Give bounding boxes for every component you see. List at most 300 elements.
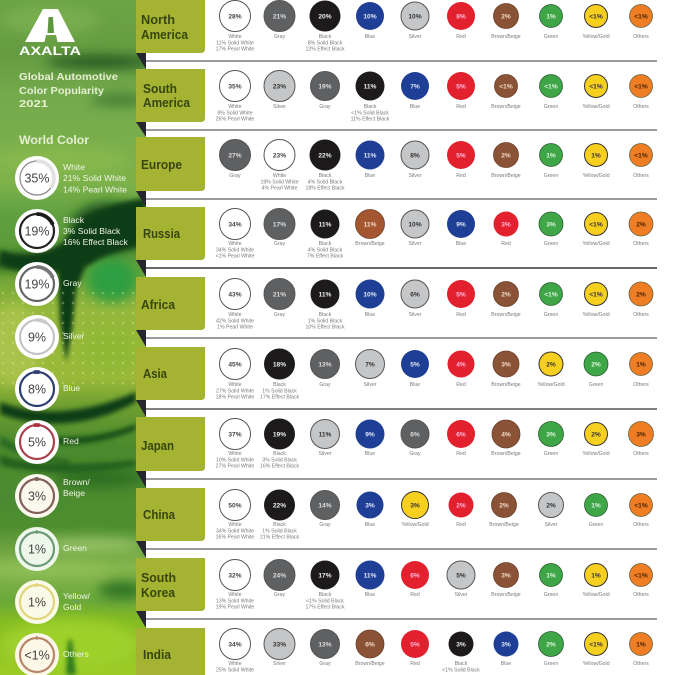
row: South America colors: 11% <box>364 84 377 90</box>
row: Japan colors: 11% <box>319 432 332 438</box>
row: South Korea colors: Green <box>544 592 558 598</box>
row: India colors: 3% <box>501 642 511 648</box>
row: China colors: Red <box>456 522 466 528</box>
row: Africa colors: 6% <box>410 292 420 298</box>
row: India colors: 5% <box>410 642 420 648</box>
row: Asia colors: 1% <box>636 362 646 368</box>
row: South America colors: <1% <box>589 84 603 90</box>
row: Asia colors: 2% <box>546 362 556 368</box>
row: South Korea colors: 13% Solid White <box>216 598 254 604</box>
panel: green photographic background <box>0 0 155 675</box>
panel: Asia label <box>136 347 205 400</box>
panel: Africa label <box>136 277 205 330</box>
row: Africa colors: 2% <box>636 292 646 298</box>
logo: Axalta: AXALTA <box>19 46 81 58</box>
row: Africa colors: 10% Effect Black <box>305 325 345 331</box>
row: Russia colors: Silver <box>409 241 422 247</box>
row: Europe colors: 2% <box>501 152 511 160</box>
row: Asia colors: 45% <box>228 362 242 368</box>
row: Russia colors: 11% <box>319 222 332 228</box>
row: North America colors: <1% <box>634 14 648 20</box>
row: India colors: 33% <box>273 642 286 648</box>
row: Asia colors: Silver <box>364 382 377 388</box>
row: Africa colors: Green <box>544 312 558 318</box>
row: Africa colors: 2% <box>501 292 511 298</box>
row: India colors: Brown/Beige <box>355 661 385 667</box>
row: North America colors: 21% <box>273 14 286 20</box>
row: India colors: Blue <box>501 661 511 667</box>
world color: Black 19%: Black <box>63 215 85 225</box>
row: South Korea colors: 17% <box>318 572 332 580</box>
panel: Africa label: Africa <box>141 297 176 312</box>
row: Asia colors: 5% <box>410 362 420 368</box>
row: Africa colors: 21% <box>273 292 286 298</box>
row: North America colors: Silver <box>409 34 422 40</box>
row: North America colors: 10% <box>363 14 377 20</box>
row: Russia colors: White <box>228 241 242 247</box>
row: South Korea colors: Black <box>319 592 332 598</box>
row: North America colors: 11% Solid White <box>216 40 254 46</box>
row: Japan colors: Others <box>633 451 649 457</box>
row: Japan colors: 10% Solid White <box>216 457 254 463</box>
row: Europe colors: <1% <box>634 152 648 160</box>
row: South America colors: 19% <box>318 84 332 90</box>
row: Russia colors: Black <box>319 241 332 247</box>
row: South Korea colors: White <box>228 592 242 598</box>
row: Asia colors: Others <box>633 382 649 388</box>
row: Asia colors: 17% Effect Black <box>260 395 299 401</box>
row: Asia colors: 18% Pearl White <box>216 395 254 401</box>
row: Japan colors: Red <box>456 451 466 457</box>
row: India colors: 6% <box>365 642 375 648</box>
panel: Europe label <box>136 137 205 191</box>
row: Europe colors: 23% <box>273 152 286 160</box>
row: Africa colors: Black <box>319 312 332 318</box>
row: Europe colors: 19% Solid White <box>260 179 299 185</box>
world color: Gray 19% <box>15 262 82 306</box>
panel: Europe label: Europe <box>141 157 182 172</box>
panel: North America label: North <box>141 12 175 27</box>
row: Japan colors: 4% <box>501 432 511 438</box>
row: Asia colors: 18% <box>273 362 286 368</box>
row: North America colors: White <box>228 34 242 40</box>
panel: North America label <box>136 0 205 53</box>
row: China colors: 2% <box>546 502 556 510</box>
row: China colors: 2% <box>456 502 466 510</box>
row: North America colors: 1% <box>546 14 556 20</box>
panel: North America label: America <box>141 27 189 42</box>
world color: Yellow/Gold 1%: Gold <box>63 602 81 612</box>
world color: Others <1%: <1% <box>24 648 50 662</box>
row: Africa colors: 10% <box>363 292 377 298</box>
row: India colors: Black <box>455 661 468 667</box>
row: Russia colors: 11% <box>364 222 377 228</box>
row: Europe colors: 8% <box>410 152 420 160</box>
row: Asia colors: 7% <box>365 362 375 368</box>
row: India colors: Silver <box>273 661 286 667</box>
row: South Korea colors: <1% <box>634 572 648 580</box>
row: Asia colors: 1% Solid Black <box>262 388 297 394</box>
row: South Korea colors: Others <box>633 592 649 598</box>
row: South America colors: Red <box>456 104 466 110</box>
row: Asia colors: 4% <box>456 362 466 368</box>
row: Africa colors: 11% <box>319 292 332 298</box>
world color: Brown/Beige 3% <box>15 474 90 518</box>
row: China colors: Yellow/Gold <box>401 522 429 528</box>
row: South Korea colors: 24% <box>273 572 286 580</box>
row: Japan colors: 37% <box>228 432 242 438</box>
row: South America colors: 23% <box>273 84 286 90</box>
row: North America colors: Others <box>633 34 649 40</box>
row: India colors: 1% <box>636 642 646 648</box>
row: Russia colors: Gray <box>274 241 286 247</box>
row: India colors: <1% Solid Black <box>442 667 480 673</box>
row: India colors: 25% Solid White <box>216 667 254 673</box>
row: North America colors: 8% Solid Black <box>308 40 343 46</box>
world color: White 35% <box>15 156 127 200</box>
row: South Korea colors: 1% <box>546 572 556 580</box>
row: North America colors: 10% <box>408 14 422 20</box>
row: South America colors: Others <box>633 104 649 110</box>
world color: Yellow/Gold 1%: Yellow/ <box>63 591 91 601</box>
row: Asia colors: Yellow/Gold <box>537 382 565 388</box>
row: South America colors: Brown/Beige <box>491 104 521 110</box>
world color: Yellow/Gold 1%: 1% <box>28 596 46 610</box>
row: South Korea colors: 6% <box>410 572 420 580</box>
row: Japan colors: 19% <box>273 432 286 438</box>
row: South America colors <box>216 70 652 123</box>
row: China colors: 3% <box>365 502 375 510</box>
row: Russia colors: 2% <box>636 222 646 228</box>
world color: White 35%: White <box>63 162 85 172</box>
row: North America colors: 28% <box>228 14 242 20</box>
row: South America colors: <1% <box>499 84 513 90</box>
world color: Yellow/Gold 1% <box>15 580 91 624</box>
row: South Korea colors: 32% <box>228 572 242 580</box>
world color: Black 19%: 16% Effect Black <box>63 237 129 247</box>
world color: Black 19%: 19% <box>24 224 50 238</box>
row: South America colors: Silver <box>273 104 286 110</box>
row: South America colors: Yellow/Gold <box>582 104 610 110</box>
heading: World Color: World Color <box>19 133 89 147</box>
row: North America colors <box>216 0 652 53</box>
row: Russia colors: 3% <box>546 222 556 228</box>
row: South Korea colors <box>216 560 652 611</box>
row: Africa colors <box>216 278 653 331</box>
row: Europe colors: Green <box>544 173 558 179</box>
panel: Japan label <box>136 417 205 471</box>
row: Africa colors: White <box>228 312 242 318</box>
row: Africa colors: Brown/Beige <box>491 312 521 318</box>
row: Europe colors: Yellow/Gold <box>582 173 610 179</box>
panel: South Korea label: South <box>141 570 176 585</box>
row: North America colors: 12% Effect Black <box>305 47 345 53</box>
row: Japan colors: Gray <box>409 451 421 457</box>
row: Africa colors: 43% <box>228 292 242 298</box>
row: Africa colors: Gray <box>274 312 286 318</box>
row: Japan colors: 9% <box>365 432 375 438</box>
row: Japan colors: Black <box>273 451 286 457</box>
row: Russia colors: 34% <box>228 222 242 228</box>
row: China colors: 2% <box>499 502 509 510</box>
world color: Others <1% <box>15 633 89 675</box>
row: China colors: White <box>228 522 242 528</box>
row: Russia colors: Green <box>544 241 558 247</box>
panel: China label: China <box>143 507 176 522</box>
row: India colors: 3% <box>456 642 466 648</box>
title: 2021 <box>19 98 48 110</box>
row: China colors <box>216 490 652 541</box>
row: South Korea colors: 5% <box>456 572 466 580</box>
row: Asia colors: 2% <box>591 362 601 368</box>
world color: Red 5%: 5% <box>28 436 46 450</box>
world color: Green 1%: 1% <box>28 542 46 556</box>
row: South America colors: 9% Solid White <box>217 110 253 116</box>
world color: Brown/Beige 3%: Beige <box>63 488 85 498</box>
row: Europe colors: Silver <box>409 173 422 179</box>
row: South America colors: <1% <box>544 84 558 90</box>
row: North America colors: Green <box>544 34 558 40</box>
row: Europe colors: Red <box>456 173 466 179</box>
world color: Black 19%: 3% Solid Black <box>63 226 121 236</box>
world color: Blue 8%: Blue <box>63 383 80 393</box>
row: Japan colors: 6% <box>410 432 420 438</box>
row: Japan colors: Brown/Beige <box>491 451 521 457</box>
row: China colors: Others <box>633 522 649 528</box>
row: Europe colors: 5% <box>456 152 466 160</box>
row: North America colors: Gray <box>274 34 286 40</box>
row: Russia colors: 4% Solid Black <box>308 247 343 253</box>
row: China colors: 1% <box>591 502 601 510</box>
world color: Blue 8%: 8% <box>28 382 46 396</box>
row: South America colors: 7% <box>410 84 420 90</box>
row: South America colors: 5% <box>456 84 466 90</box>
row: Europe colors: 1% <box>591 152 601 160</box>
row: Africa colors: Blue <box>365 312 375 318</box>
row: China colors: 50% <box>228 502 242 510</box>
world color: Brown/Beige 3%: 3% <box>28 490 46 504</box>
row: Europe colors: Gray <box>229 173 241 179</box>
row: South Korea colors: Gray <box>274 592 286 598</box>
world color: Gray 19%: Gray <box>63 278 82 288</box>
world color: Brown/Beige 3%: Brown/ <box>63 477 90 487</box>
row: Japan colors: 3% <box>636 432 646 438</box>
row: China colors: Gray <box>319 522 331 528</box>
row: China colors: Blue <box>365 522 375 528</box>
world color: Silver 9% <box>15 315 85 359</box>
row: Russia colors <box>216 208 653 260</box>
row: Russia colors: Yellow/Gold <box>582 241 610 247</box>
panel: Russia label: Russia <box>143 226 181 241</box>
row: China colors: 3% <box>410 502 420 510</box>
row: Japan colors: 3% Solid Black <box>262 457 297 463</box>
row: Asia colors: Gray <box>319 382 331 388</box>
row: China colors: 1% Solid Black <box>262 528 297 534</box>
row: South Korea colors: Red <box>410 592 420 598</box>
row: Japan colors: 3% <box>546 432 556 438</box>
row: South Korea colors: Blue <box>365 592 375 598</box>
row: North America colors: Black <box>319 34 332 40</box>
row: South America colors: Green <box>544 104 558 110</box>
panel: China label <box>136 488 205 541</box>
row: Japan colors: 2% <box>591 432 601 438</box>
row: Africa colors: 42% Solid White <box>216 318 254 324</box>
row: China colors: 21% Effect Black <box>260 535 299 541</box>
row: India colors: Green <box>544 661 558 667</box>
row: Asia colors: Black <box>273 382 286 388</box>
title: Global Automotive <box>19 71 118 83</box>
panel: South America label: South <box>143 81 177 96</box>
row: India colors <box>216 628 652 673</box>
row: Europe colors: 22% <box>318 152 332 160</box>
row: Asia colors: Green <box>589 382 603 388</box>
row: Africa colors: Silver <box>409 312 422 318</box>
row: Europe colors: Brown/Beige <box>491 173 521 179</box>
row: Africa colors: 1% Pearl White <box>217 325 253 331</box>
row: Europe colors: Blue <box>365 173 375 179</box>
title: Color Popularity <box>19 85 104 97</box>
row: Japan colors: Blue <box>365 451 375 457</box>
panel: Japan label: Japan <box>141 438 174 453</box>
row: Russia colors: <1% <box>589 222 603 228</box>
row: Japan colors <box>216 418 654 470</box>
row: Russia colors: 3% <box>501 222 511 228</box>
row: South America colors: Gray <box>319 104 331 110</box>
panel: South America label: America <box>143 95 191 110</box>
row: Europe colors: Black <box>319 173 332 179</box>
row: Russia colors: 7% Effect Black <box>307 254 344 260</box>
panel: South Korea label <box>136 558 205 611</box>
world color: Green 1% <box>15 527 87 571</box>
row: Asia colors: Brown/Beige <box>491 382 521 388</box>
row: India colors: 13% <box>318 642 332 648</box>
row: Europe colors: Others <box>633 173 649 179</box>
row: Japan colors: White <box>228 451 242 457</box>
row: Asia colors <box>216 348 652 401</box>
row: South Korea colors: Brown/Beige <box>491 592 521 598</box>
row: Europe colors: 4% Pearl White <box>262 186 297 192</box>
row: Europe colors: 18% Effect Black <box>305 186 345 192</box>
row: Africa colors: 1% Solid Black <box>308 318 343 324</box>
row: India colors: 34% <box>228 642 242 648</box>
row: China colors: 34% Solid White <box>216 528 254 534</box>
row: Asia colors: 3% <box>501 362 511 368</box>
panel: Asia label: Asia <box>143 366 168 381</box>
row: South Korea colors: 11% <box>364 572 377 580</box>
row: Europe colors: 27% <box>228 152 242 160</box>
row: South America colors: 35% <box>228 84 242 90</box>
row: India colors: Gray <box>319 661 331 667</box>
row: North America colors: <1% <box>589 14 603 20</box>
row: Japan colors: Green <box>544 451 558 457</box>
row: Asia colors: Blue <box>410 382 420 388</box>
panel: South America label <box>136 69 205 122</box>
row: Japan colors: 16% Effect Black <box>260 464 299 470</box>
row: South Korea colors: Silver <box>455 592 468 598</box>
row: China colors: Black <box>273 522 286 528</box>
row: Russia colors: Red <box>501 241 511 247</box>
world color: Red 5% <box>15 420 79 464</box>
row: Asia colors: White <box>228 382 242 388</box>
row: Africa colors: Yellow/Gold <box>582 312 610 318</box>
row: Russia colors: 10% <box>408 222 422 228</box>
row: South America colors: 11% Effect Black <box>351 117 390 123</box>
panel: India label: India <box>143 647 172 662</box>
row: South America colors: Black <box>364 104 377 110</box>
row: India colors: Others <box>633 661 649 667</box>
row: North America colors: Yellow/Gold <box>582 34 610 40</box>
world color: Blue 8% <box>15 367 80 411</box>
row: Africa colors: Red <box>456 312 466 318</box>
row: South Korea colors: 1% <box>591 572 601 580</box>
row: Japan colors: 6% <box>456 432 466 438</box>
row: China colors: 14% <box>318 502 332 510</box>
world color: Gray 19%: 19% <box>24 278 50 292</box>
row: South Korea colors: 17% Effect Black <box>305 605 345 611</box>
row: Africa colors: <1% <box>544 292 558 298</box>
row: China colors: <1% <box>634 502 648 510</box>
row: Russia colors: 17% <box>273 222 286 228</box>
row: Africa colors: 5% <box>456 292 466 298</box>
row: Russia colors: 9% <box>456 222 466 228</box>
row: South Korea colors: 3% <box>501 572 511 580</box>
row: Asia colors: 27% Solid White <box>216 388 254 394</box>
row: Russia colors: Blue <box>456 241 466 247</box>
row: North America colors: Brown/Beige <box>491 34 521 40</box>
row: China colors: Green <box>589 522 603 528</box>
row: South America colors: Blue <box>410 104 420 110</box>
row: South Korea colors: Yellow/Gold <box>582 592 610 598</box>
world color: White 35%: 14% Pearl White <box>63 184 127 194</box>
row: Japan colors: Silver <box>319 451 332 457</box>
row: China colors: 16% Pearl White <box>216 535 254 541</box>
row: South Korea colors: 19% Pearl White <box>216 605 254 611</box>
panel: India label <box>136 628 205 675</box>
row: India colors: Red <box>410 661 420 667</box>
row: Russia colors: 34% Solid White <box>216 247 254 253</box>
row: South America colors: White <box>228 104 242 110</box>
title <box>19 71 118 110</box>
panel: Russia label <box>136 207 205 260</box>
row: Africa colors: <1% <box>589 292 603 298</box>
world color: White 35%: 35% <box>24 172 50 186</box>
row: North America colors: Red <box>456 34 466 40</box>
row: Europe colors: 11% <box>364 152 377 160</box>
row: Russia colors: <1% Pearl White <box>216 254 255 260</box>
row: Europe colors: 1% <box>546 152 556 160</box>
panel: South Korea label: Korea <box>141 585 176 600</box>
row: China colors: Brown/Beige <box>489 522 519 528</box>
row: China colors: 22% <box>273 502 286 510</box>
logo: Axalta <box>19 9 81 58</box>
row: Europe colors: White <box>273 173 286 179</box>
row: Russia colors: Others <box>633 241 649 247</box>
world color: White 35%: 21% Solid White <box>63 173 126 183</box>
world color: Green 1%: Green <box>63 543 87 553</box>
row: Africa colors: Others <box>633 312 649 318</box>
row: South America colors: 26% Pearl White <box>216 117 254 123</box>
row: Europe colors <box>220 140 652 192</box>
row: South America colors: <1% Solid Black <box>351 110 389 116</box>
world color: Black 19% <box>15 209 129 253</box>
world color: Silver 9%: 9% <box>28 330 46 344</box>
row: Russia colors: Brown/Beige <box>355 241 385 247</box>
row: South Korea colors: <1% Solid Black <box>306 598 344 604</box>
row: China colors: Silver <box>545 522 558 528</box>
row: North America colors: 2% <box>501 14 511 20</box>
row: India colors: Yellow/Gold <box>582 661 610 667</box>
row: South America colors: <1% <box>634 84 648 90</box>
